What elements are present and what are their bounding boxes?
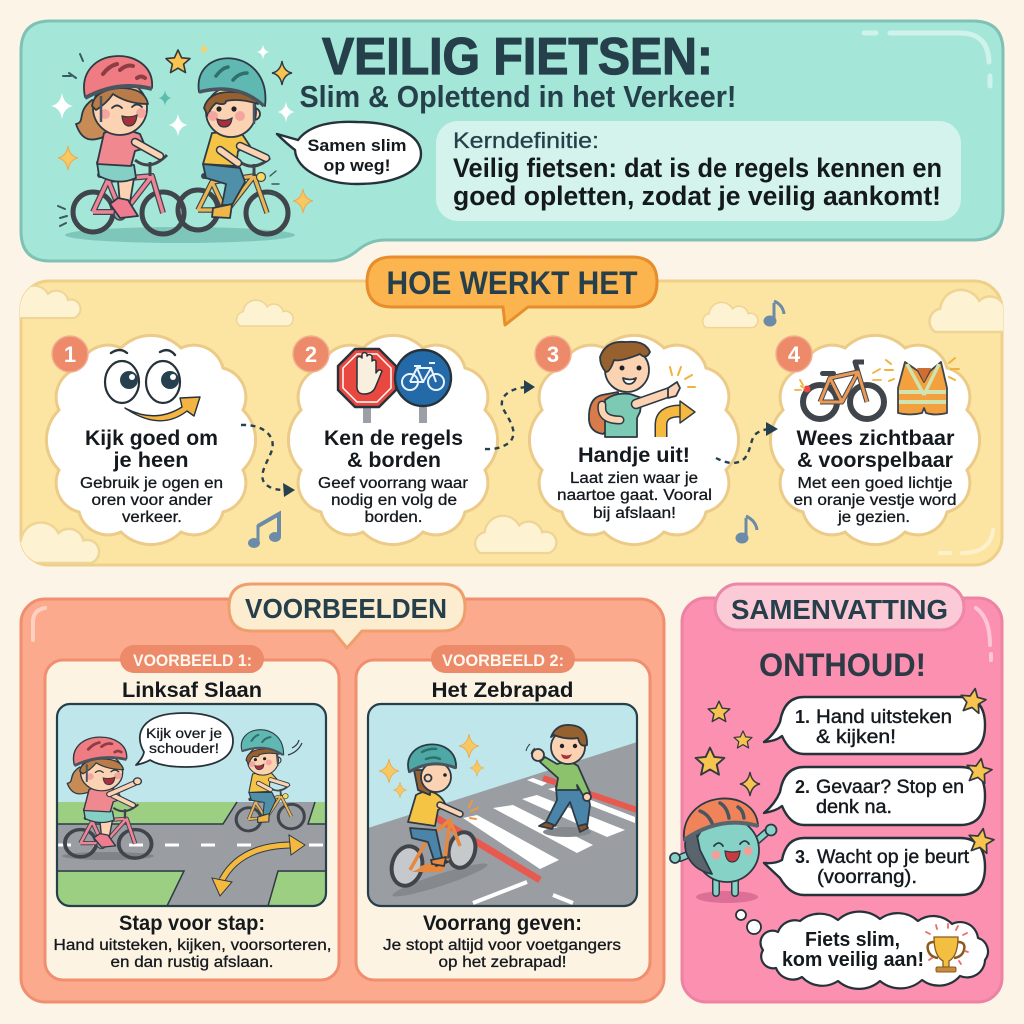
step 4	[770, 335, 980, 545]
step 2: nodig en volg de	[331, 492, 457, 509]
card body text: op het zebrapad!	[438, 954, 566, 971]
arrow: step 2 to 3	[485, 380, 535, 449]
step 4: & voorspelbaar	[797, 449, 953, 472]
bubble 2: denk na.	[816, 797, 892, 818]
step 4: en oranje vestje word	[794, 492, 956, 509]
card heading: stap voor stap: Stap voor stap:	[119, 912, 265, 935]
bubble 3: Wacht op je beurt	[817, 847, 970, 868]
step 1: oren voor ander	[92, 492, 212, 509]
card body text: Hand uitsteken, kijken, voorsorteren,	[54, 937, 332, 954]
header panel shape	[21, 21, 1003, 261]
step 2	[288, 335, 498, 545]
icon: trophy	[926, 924, 968, 972]
icon: bicycle with light	[795, 362, 884, 419]
speech bubble: kijk over je schouder	[136, 713, 233, 767]
arrow: step 1 to 2	[241, 425, 295, 497]
step 1: Kijk goed om	[85, 427, 218, 450]
card title: Linksaf Slaan	[122, 679, 262, 702]
boy on bike looking back	[227, 726, 306, 834]
label: voorbeeld 1	[120, 645, 264, 673]
card heading: voorrang geven: Voorrang geven:	[423, 912, 582, 935]
icon: child signalling with turn arrow	[589, 342, 695, 437]
sparkles	[379, 734, 484, 798]
badge 4: 4	[788, 342, 801, 367]
step 1	[46, 335, 256, 545]
step 3: naartoe gaat. Vooral	[557, 487, 712, 504]
title: VEILIG FIETSEN:	[322, 28, 713, 86]
icon: eyes with arrow	[105, 350, 200, 421]
thought bubble: Fiets slim,	[805, 929, 900, 951]
panel: header	[21, 21, 1003, 261]
card body text	[383, 937, 621, 971]
speech bubble: Samen slim op weg	[277, 122, 421, 184]
definition box: Kerndefinitie:	[453, 128, 599, 153]
bubble 1: 1.	[795, 707, 810, 727]
thought bubble: kom veilig aan!	[782, 949, 924, 971]
subtitle: Slim & Oplettend in het Verkeer!	[300, 80, 736, 114]
step 3: bij afslaan!	[593, 505, 676, 522]
step 1: Gebruik je ogen en	[80, 475, 223, 492]
orange panel shape	[21, 599, 664, 1002]
illustration: yielding at zebra crossing	[368, 704, 637, 906]
bubble 1	[764, 686, 988, 754]
bubble 3	[764, 826, 996, 895]
speech bubble: Samen slim op weg: Samen slim	[308, 136, 406, 155]
definition box	[436, 121, 961, 221]
pink panel shape	[682, 598, 1002, 1002]
yellow panel shape	[21, 281, 1002, 565]
bubble 3: 3.	[795, 847, 810, 867]
badge 3	[535, 336, 571, 372]
label: voorbeeld 1: VOORBEELD 1:	[133, 651, 252, 670]
card: voorbeeld 2	[356, 645, 650, 980]
badge 2	[293, 336, 329, 372]
illustration: two children cycling	[51, 43, 313, 243]
arrow: step 3 to 4	[716, 422, 778, 463]
card body text: Je stopt altijd voor voetgangers	[383, 937, 621, 954]
heading: onthoud: ONTHOUD!	[759, 647, 926, 683]
child on bike stopping	[387, 744, 489, 901]
badge 1: 1	[64, 342, 76, 367]
heading: voorbeelden: VOORBEELDEN	[245, 593, 447, 624]
heading: samenvatting	[715, 584, 964, 630]
illustration: turning left at junction	[57, 704, 326, 906]
bubble 1: & kijken!	[816, 727, 896, 748]
speech bubble: Samen slim op weg: op weg!	[324, 156, 390, 175]
step 2: Geef voorrang waar	[318, 475, 468, 492]
step 2: Ken de regels	[324, 427, 463, 450]
card body text: en dan rustig afslaan.	[110, 954, 274, 971]
panel: samenvatting	[670, 584, 1002, 1002]
bubble 2: 2.	[795, 777, 810, 797]
icon: music notes	[248, 301, 784, 548]
speech bubble: kijk over je schouder: schouder!	[149, 740, 219, 756]
step 2: & borden	[347, 449, 441, 472]
badge 3: 3	[547, 342, 559, 367]
stars	[696, 701, 760, 796]
label: voorbeeld 2: VOORBEELD 2:	[442, 651, 564, 670]
card body text	[54, 937, 332, 971]
speech bubble: kijk over je schouder: Kijk over je	[146, 725, 222, 741]
definition box: goed opletten, zodat je veilig aankomt!	[453, 181, 941, 211]
step 4: Wees zichtbaar	[796, 427, 954, 450]
thought bubble	[736, 910, 988, 989]
bubble 2: Gevaar? Stop en	[816, 777, 964, 798]
step 3: Laat zien waar je	[570, 470, 698, 487]
step 4: Met een goed lichtje	[798, 475, 952, 492]
mascot: smiling helmet character	[670, 799, 776, 903]
definition box: Veilig fietsen: dat is de regels kennen en	[453, 153, 942, 183]
card title: Het Zebrapad	[432, 679, 574, 702]
icon: orange safety vest	[885, 358, 959, 414]
step 2: borden.	[364, 509, 422, 526]
label: voorbeeld 2	[431, 645, 575, 673]
step 1: je heen	[112, 449, 188, 472]
heading: hoe werkt het: HOE WERKT HET	[386, 265, 638, 301]
bubble 3: (voorrang).	[817, 867, 917, 888]
badge 2: 2	[305, 342, 317, 367]
step 1: verkeer.	[122, 509, 182, 526]
girl on bike signalling	[65, 737, 152, 858]
step 3: Handje uit!	[578, 444, 690, 467]
pedestrian waving	[526, 725, 591, 837]
icon: stop hand sign and bicycle sign	[338, 349, 451, 423]
bubble 1: Hand uitsteken	[816, 707, 952, 728]
step 3	[529, 335, 739, 545]
panel: voorbeelden	[21, 584, 664, 1002]
heading: voorbeelden	[229, 584, 465, 648]
badge 1	[52, 336, 88, 372]
step 4: je gezien.	[837, 509, 910, 526]
bubble 2	[764, 756, 994, 825]
panel: hoe werkt het	[10, 257, 1021, 565]
heading: hoe werkt het	[367, 257, 657, 325]
badge 4	[776, 336, 812, 372]
card: voorbeeld 1	[45, 645, 339, 980]
heading: samenvatting: SAMENVATTING	[731, 594, 948, 625]
